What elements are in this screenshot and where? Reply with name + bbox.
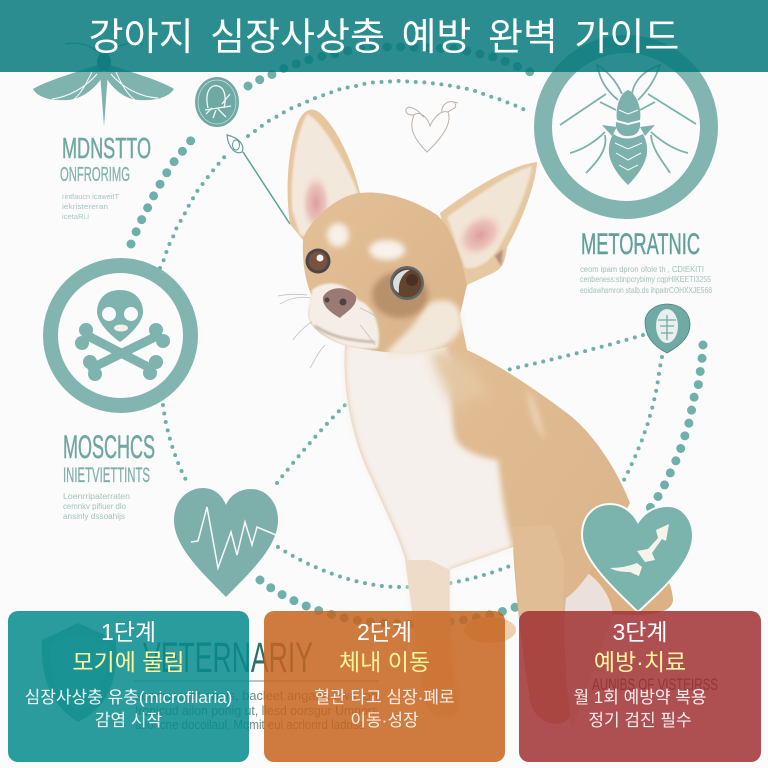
title: 강아지 심장사상충 예방 완벽 가이드 (89, 17, 679, 59)
dog chest fur (344, 330, 570, 724)
dog left ear (288, 110, 360, 240)
heading: MDNSTTO block: icetaRi.i (62, 212, 89, 221)
card: step 1: 1단계 (101, 619, 156, 645)
hidden layer behind cards: veterinary branding: VETERNARIY (143, 634, 313, 682)
dog body (344, 300, 630, 724)
icon: mosquito in ring (543, 44, 709, 210)
heading: MDNSTTO block (60, 133, 151, 221)
card: step 3 (519, 611, 761, 762)
card: step 2 (264, 611, 505, 762)
icon: round parasite badge (195, 77, 239, 127)
hidden layer behind cards: veterinary branding: Ironicud ailon ponig ut, llesd oorsgur Umnors (135, 703, 378, 718)
card: step 1 (8, 611, 249, 762)
icon: needle with line (227, 135, 290, 224)
card: step 2: 2단계 (357, 619, 412, 645)
card: step 3: 예방·치료 (594, 649, 686, 675)
card: step 2: 이동·성장 (350, 711, 419, 730)
icon: parasite shield badge (645, 304, 690, 353)
heading: METORATNIC block: eoidawhsmron stalb.ds ihpaitrCOHXXJE568 (580, 285, 712, 295)
large dotted orbit (131, 47, 703, 624)
illustration: chihuahua (278, 110, 673, 730)
heading: MDNSTTO block: rintfaucn icaweitT (62, 192, 119, 201)
dog right ear (440, 162, 537, 285)
icon: heart with arrows (582, 504, 693, 612)
hidden layer behind cards: veterinary branding (42, 623, 718, 732)
icon: moth (33, 43, 174, 127)
card: step 3: 월 1회 예방약 복용 (573, 688, 707, 707)
dog eyes (306, 248, 424, 300)
heading: MOSCHCS block: Loenrripaterraten (63, 492, 130, 501)
dog hind leg and paws (464, 500, 673, 730)
icon: heart with ECG line (174, 488, 278, 597)
heading: MOSCHCS block (63, 429, 155, 521)
card: step 1: 모기에 물림 (72, 649, 185, 675)
heading: METORATNIC block (580, 228, 712, 295)
heading: MOSCHCS block: INIETVIETTINTS (63, 464, 150, 487)
card: step 3: 3단계 (612, 619, 668, 645)
icon: skull and crossbones ring (50, 266, 190, 406)
heading: MOSCHCS block: MOSCHCS (63, 429, 155, 465)
card: step 2: 혈관 타고 심장·폐로 (314, 688, 455, 707)
dog head (303, 192, 467, 353)
card: step 1: 심장사상충 유충(microfilaria) (25, 688, 232, 707)
dog face markings (308, 223, 462, 357)
heading: MDNSTTO block: MDNSTTO (62, 133, 151, 165)
dog nose and whiskers (278, 288, 380, 368)
heading: MOSCHCS block: ansinly dssoahijs (63, 512, 125, 521)
small dotted orbit (160, 81, 662, 587)
hidden layer behind cards: veterinary branding: ationcne docoilaul, Mqmit eul acrlorird ladnsa (135, 717, 366, 732)
heading: MOSCHCS block: cemnkv pifiuer dlo (63, 502, 127, 511)
card: step 2: 체내 이동 (339, 649, 430, 675)
hidden layer behind cards: veterinary branding: seorrusccnt anpis, bacleet angatta bwa ton (135, 688, 378, 703)
heading: MDNSTTO block: iekristereran (62, 202, 108, 211)
heading: METORATNIC block: ceom ipam dpron ofole th , CDIEKITI (580, 264, 704, 274)
icon: outline heart (406, 102, 458, 152)
heading: METORATNIC block: cenbeness:stinpcrybimy cqpHIKEETI3255 (580, 274, 711, 284)
card: step 1: 감염 시작 (95, 711, 162, 730)
card: step 3: 정기 검진 필수 (588, 711, 692, 730)
heading: MDNSTTO block: ONFRORIMG (60, 164, 130, 186)
header banner (0, 0, 768, 72)
